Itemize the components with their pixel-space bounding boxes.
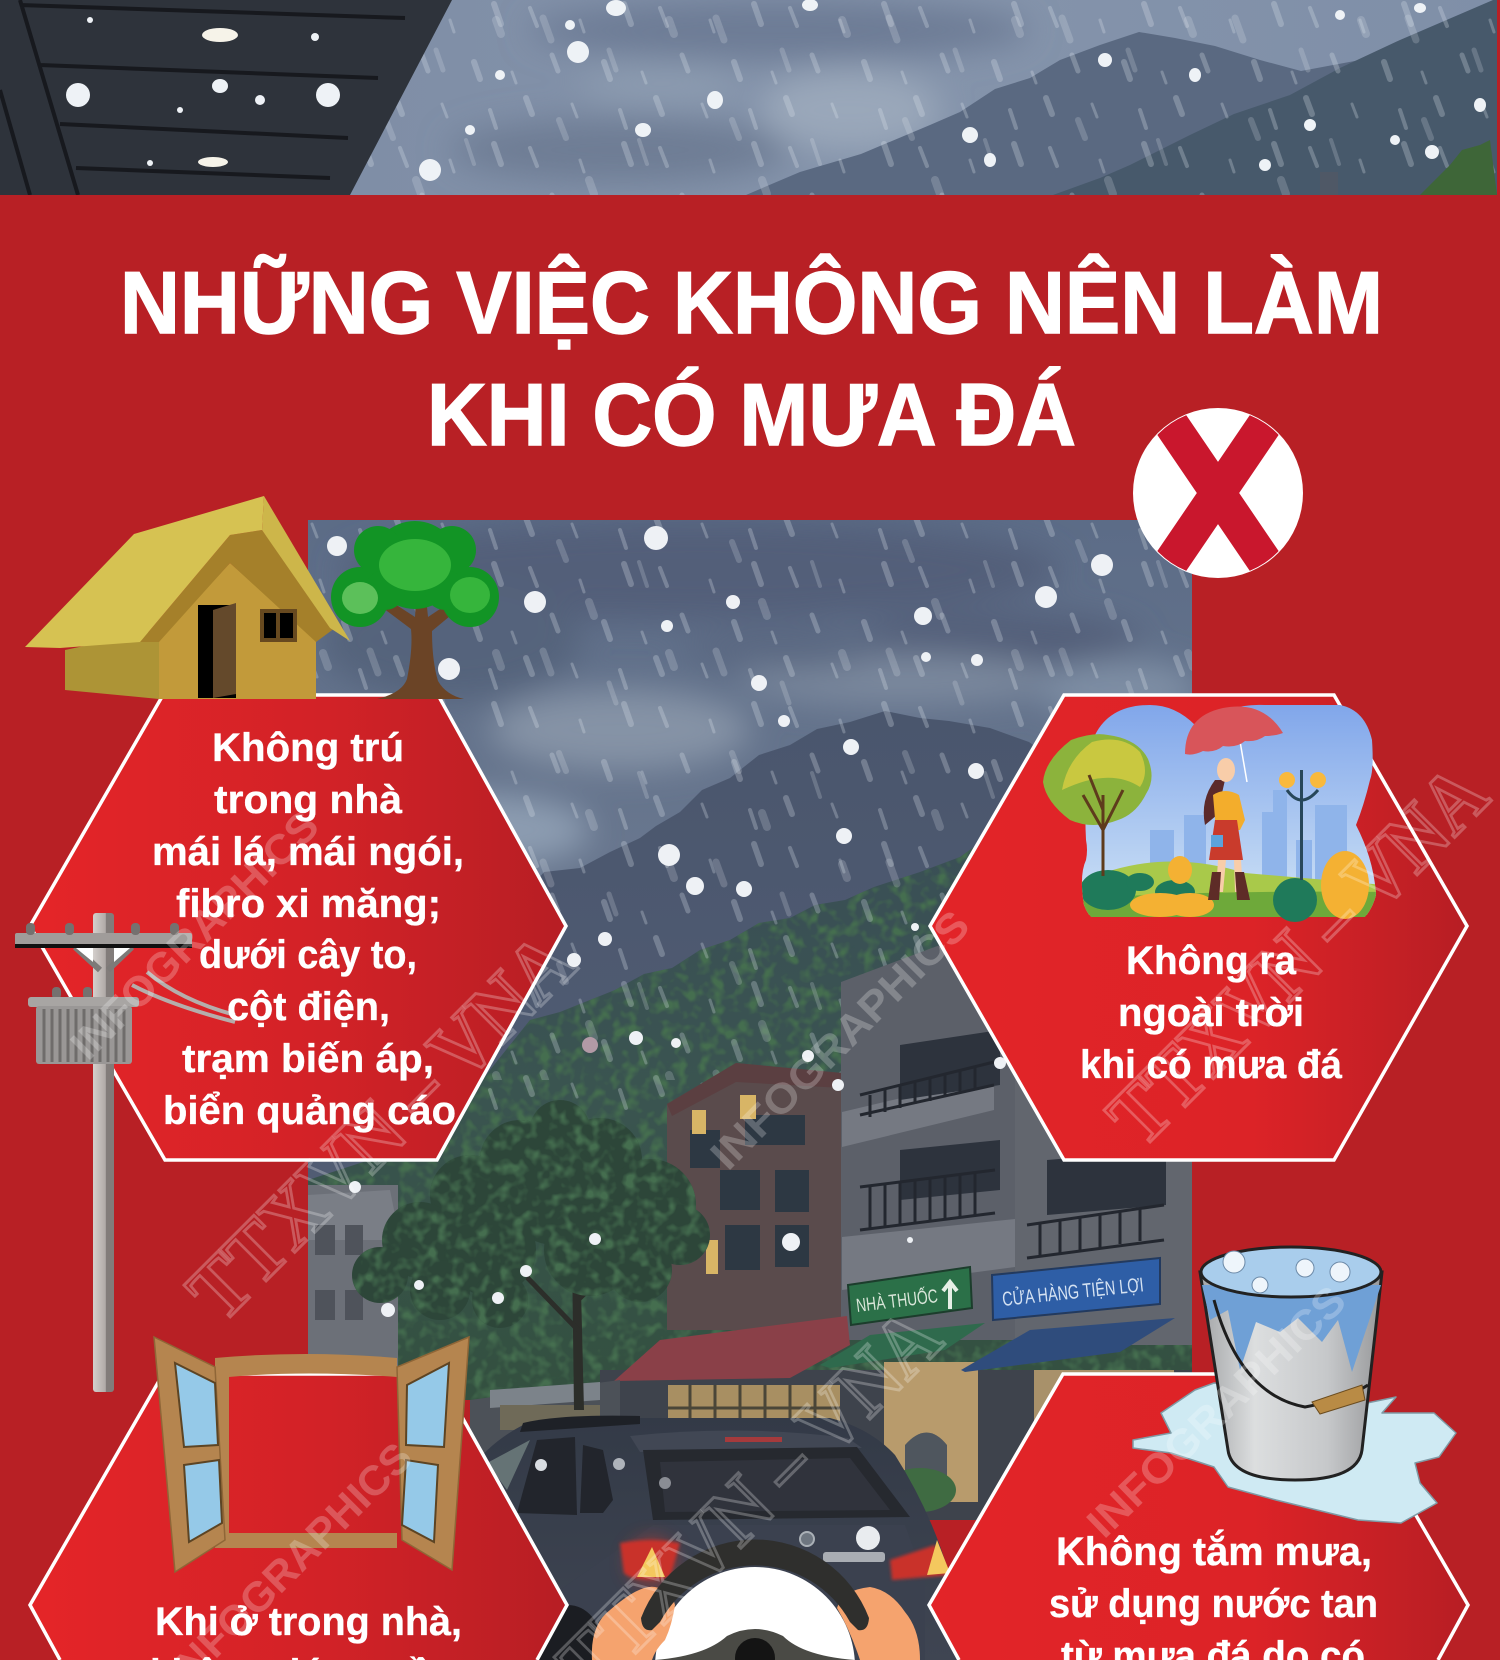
- icon: green tree: [331, 521, 499, 699]
- icon: electric pole with transformer: [15, 913, 235, 1392]
- text: hexagon 3: Khi ở trong nhà,: [155, 1600, 462, 1644]
- text: hexagon 1: mái lá, mái ngói,: [152, 830, 464, 874]
- text: hexagon 1: Không trú: [212, 726, 404, 770]
- hailstones: [327, 526, 1113, 1317]
- text: hexagon 2: Không ra: [1126, 939, 1297, 983]
- driver hands: [592, 1587, 920, 1660]
- hexagon 3: stay away from windows: [30, 1374, 567, 1660]
- title: KHI CÓ MƯA ĐÁ: [427, 365, 1076, 464]
- steering wheel rim: [641, 1539, 869, 1630]
- icon: bucket of melted hail with puddle: [1133, 1247, 1456, 1523]
- icon: thatched house: [25, 496, 350, 699]
- text: hexagon 1: biển quảng cáo: [163, 1089, 456, 1133]
- central photo: hailstorm over street with car: [308, 520, 1200, 1660]
- text: hexagon 1: cột điện,: [227, 985, 390, 1029]
- icon: woman with umbrella in rain: [1043, 700, 1390, 922]
- text: hexagon 4: sử dụng nước tan: [1049, 1582, 1378, 1626]
- text: hexagon 1: dưới cây to,: [199, 933, 417, 977]
- tree in street: [352, 1100, 710, 1410]
- title: NHỮNG VIỆC KHÔNG NÊN LÀM: [120, 253, 1383, 352]
- text: hexagon 1: fibro xi măng;: [176, 882, 441, 926]
- top photo strip: hail over mountains: [0, 0, 1500, 195]
- brown building: [667, 1063, 842, 1330]
- icon: open wooden window: [154, 1337, 469, 1572]
- hexagon 2: do not go outside: [930, 695, 1467, 1160]
- watermarks: INFOGRAPHICS: [701, 901, 978, 1178]
- watermarks: TTXVN – VNA: [170, 915, 593, 1338]
- sign: convenience store: [992, 1258, 1160, 1320]
- text: hexagon 4: Không tắm mưa,: [1056, 1528, 1372, 1574]
- text: hexagon 1: [152, 726, 464, 1133]
- sign: convenience store: CỬA HÀNG TIỆN LỢI: [1001, 1272, 1145, 1311]
- text: hexagon 1: trong nhà: [214, 778, 403, 822]
- shopfronts: [470, 1316, 1192, 1520]
- grey building with balconies: [841, 925, 1192, 1345]
- text: hexagon 2: khi có mưa đá: [1080, 1043, 1343, 1087]
- text: hexagon 2: ngoài trời: [1118, 991, 1304, 1035]
- sign: pharmacy: [848, 1267, 972, 1325]
- icon: red X in white circle: [1133, 408, 1303, 578]
- mountain: [308, 711, 1033, 1180]
- forested hill: [308, 800, 1192, 1400]
- watermarks: [61, 747, 1500, 1660]
- hexagon 1: do not shelter: [30, 695, 566, 1160]
- title: [120, 253, 1383, 464]
- text: hexagon 1: trạm biến áp,: [182, 1037, 434, 1081]
- text: hexagon 2: [1080, 939, 1343, 1087]
- background building left: [308, 1185, 398, 1366]
- watermarks: INFOGRAPHICS: [1078, 1276, 1355, 1546]
- watermarks: INFOGRAPHICS: [61, 802, 328, 1068]
- hexagon 4: do not bathe in hail: [929, 1374, 1468, 1660]
- sky with clouds: [308, 520, 1192, 876]
- text: hexagon 4: [1049, 1528, 1378, 1660]
- sign: pharmacy: NHÀ THUỐC: [855, 1285, 939, 1317]
- steering wheel hub: [655, 1567, 855, 1660]
- car rear view: [470, 1416, 962, 1660]
- rain streaks: [308, 520, 1192, 1120]
